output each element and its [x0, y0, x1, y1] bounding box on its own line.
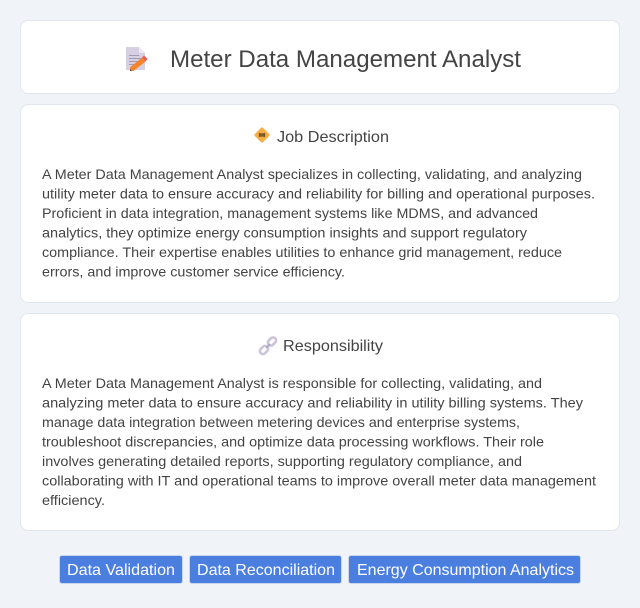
icon: document with pencil: [126, 47, 148, 71]
text block: responsibility: efficiency.: [42, 492, 105, 508]
tag: energy consumption analytics: Energy Consumption Analytics: [357, 562, 574, 579]
tag: data validation: [59, 555, 183, 584]
text block: job description: Proficient in data integration, management systems like MDMS, and advanced: [42, 205, 538, 221]
text block: responsibility: manage data integration between metering devices and enterprise systems,: [42, 414, 520, 430]
panel: job description: [20, 104, 620, 303]
text block: job description: analytics, they optimize energy consumption insights and support regulatory: [42, 224, 527, 240]
text block: responsibility: collaborating with IT and operational teams to improve overall meter data management: [42, 472, 596, 488]
panel: title: [20, 20, 620, 94]
icon: amber diamond: [254, 127, 270, 143]
tag: data reconciliation: [189, 555, 342, 584]
text block: responsibility: analyzing meter data to ensure accuracy and reliability in utility billing systems. They: [42, 394, 583, 410]
heading: job description: Job Description: [277, 129, 389, 146]
text block: job description: compliance. Their expertise enables utilities to enhance grid management, reduce: [42, 244, 562, 260]
icon: chain link: [258, 336, 278, 356]
text block: responsibility: [42, 375, 596, 508]
text block: job description: A Meter Data Management Analyst specializes in collecting, validating, and analyzing: [42, 166, 582, 182]
heading: page title: Meter Data Management Analyst: [170, 46, 521, 73]
text block: job description: errors, and improve customer service efficiency.: [42, 264, 345, 280]
tag: data reconciliation: Data Reconciliation: [197, 562, 335, 579]
text block: job description: [42, 166, 595, 280]
tag: data validation: Data Validation: [67, 562, 175, 579]
heading: responsibility: Responsibility: [283, 338, 383, 355]
text block: responsibility: A Meter Data Management Analyst is responsible for collecting, validating, and: [42, 375, 542, 391]
panel: responsibility: [20, 313, 620, 531]
text block: job description: utility meter data to ensure accuracy and reliability for billing and operational purposes.: [42, 186, 595, 202]
tag: energy consumption analytics: [348, 555, 581, 584]
text block: responsibility: involves generating detailed reports, supporting regulatory compliance, and: [42, 453, 522, 469]
text block: responsibility: troubleshoot discrepancies, and optimize data processing workflows. Their role: [42, 434, 544, 450]
